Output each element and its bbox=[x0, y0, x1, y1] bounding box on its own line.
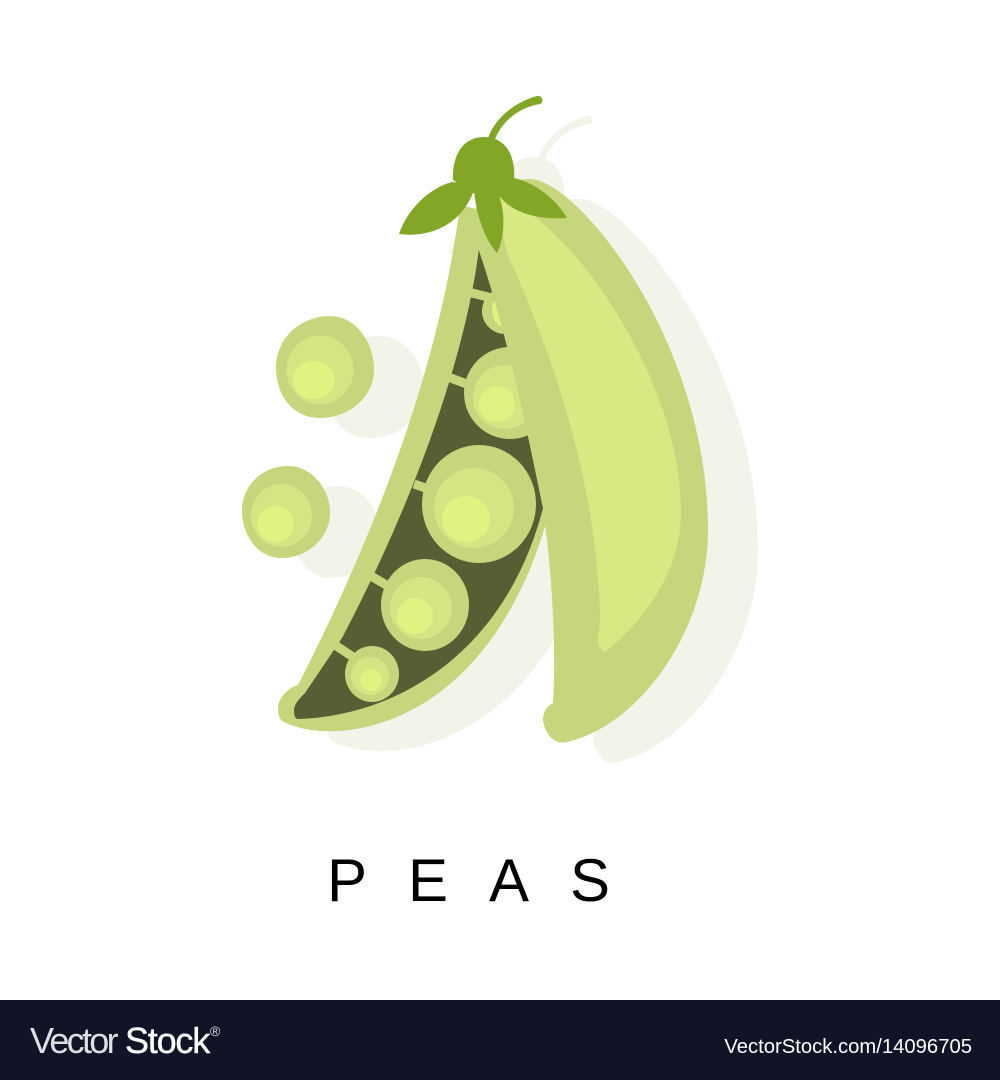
footer logo: ® bbox=[210, 1023, 220, 1039]
footer bar bbox=[0, 1000, 1000, 1080]
drop shadow of the whole illustration bbox=[292, 116, 758, 763]
closed pod bbox=[470, 179, 708, 743]
peas inside pod bbox=[345, 288, 556, 702]
footer logo: Vector bbox=[30, 1020, 116, 1061]
floating pea 1 bbox=[276, 316, 374, 418]
pea stems bbox=[332, 292, 492, 659]
footer logo: Stock bbox=[125, 1020, 209, 1061]
footer logo bbox=[30, 1020, 220, 1061]
stem and leaves bbox=[399, 96, 567, 253]
title: PEAS bbox=[327, 847, 651, 914]
open pod bbox=[278, 205, 547, 731]
footer url: VectorStock.com/14096705 bbox=[724, 1036, 972, 1058]
floating pea 2 bbox=[242, 466, 330, 558]
